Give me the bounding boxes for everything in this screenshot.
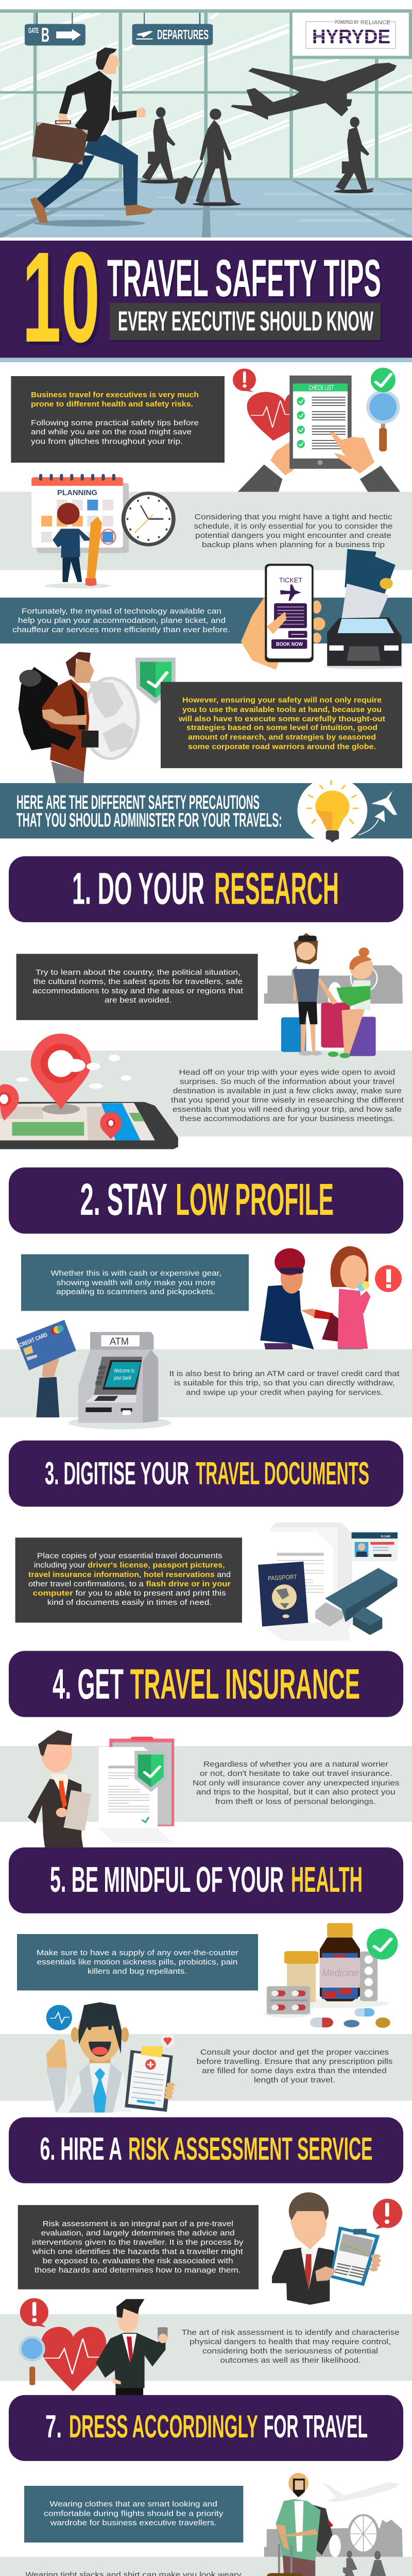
band: planning text: potential dangers you might encounter and create [195, 531, 391, 540]
heading pill 6 [9, 2117, 403, 2183]
illustration: map phone with location pins [0, 1033, 178, 1149]
panel: showing wealth [21, 1254, 249, 1311]
panel: copies of documents: kind of documents easily in times of need. [47, 1598, 212, 1607]
band: consult your doctor text: Consult your doctor and get the proper vaccines [200, 2048, 389, 2057]
band: consult your doctor text: length of your travel. [254, 2076, 335, 2084]
checklist label: CHECK LIST [309, 383, 334, 392]
panel: over the counter essentials [17, 1934, 258, 1991]
section 3: digitise your travel documents [9, 1440, 403, 1640]
band: atm card text [0, 1349, 412, 1417]
illustration: medicine bottles and pills: Medicine [322, 1968, 358, 1979]
illustration: credit card and ATM: Welcome to [114, 1368, 134, 1374]
band: head off text: Head off on your trip with your eyes wide open to avoid [179, 1068, 396, 1077]
panel: safety strategies: However, ensuring your safety will not only require [182, 696, 382, 705]
band: art of risk assessment text [0, 2314, 412, 2381]
logo: Hyryde top: POWERED BY [335, 20, 359, 25]
band: atm card text: It is also best to bring an ATM card or travel credit card that [169, 1369, 400, 1378]
big number 10 [22, 225, 103, 372]
section 4: get travel insurance [0, 1651, 412, 1850]
heading pill 5 [9, 1848, 403, 1913]
panel: safety strategies: strategies based on some level of intuition, good [186, 723, 377, 732]
illustration: tourist couple with luggage [264, 933, 403, 1058]
band: insurance text: or not, don't hesitate to take out travel insurance. [200, 1769, 392, 1778]
panel: risk assessment definition: Risk assessment is an integral part of a pre-travel [43, 2219, 233, 2228]
logo window [293, 13, 409, 56]
silhouette man [140, 107, 180, 183]
illustration: backpacker with globe and shield [19, 652, 176, 783]
heading pill 4 [9, 1651, 403, 1717]
intro panel: health and safety risks: prone to different health and safety risks. [31, 400, 193, 409]
panel: over the counter essentials: essentials like motion sickness pills, probiotics, pain [37, 1958, 237, 1967]
logo: Hyryde top [306, 20, 396, 48]
panel: learn about the country: Try to learn about the country, the political situation, [36, 968, 241, 977]
band: planning text [0, 492, 412, 570]
intro panel: health and safety risks: and while you are on the road might save [31, 428, 192, 436]
sign text: gate B [28, 24, 209, 46]
panel: over the counter essentials: Make sure to have a supply of any over-the-counter [37, 1948, 238, 1957]
panel: showing wealth: showing wealth will only make you more [57, 1279, 215, 1287]
band: insurance text [0, 1746, 412, 1822]
band: technology text: Fortunately, the myriad of technology available can [22, 607, 221, 616]
band: atm card text: is suitable for this trip, so that you can directly withdraw, [174, 1379, 395, 1387]
illustration: businessman with heart and magnifier [19, 2298, 168, 2396]
logo: Hyryde top: HYRYDE [312, 26, 390, 48]
band: art of risk assessment text: outcomes as well as their likelihood. [220, 2356, 360, 2365]
big number 10: 10 [22, 225, 100, 369]
illustration: passport, ID card and USB drive: PASSPORT [268, 1573, 298, 1582]
panel: learn about the country [16, 954, 258, 1020]
panel: copies of documents: including your driver's license , passport pictures , [34, 1561, 225, 1570]
band: consult your doctor text [0, 2034, 412, 2101]
panel: safety strategies: you to use the available tools at hand, because you [182, 705, 382, 714]
panel: learn about the country: accommodations to stay and the areas or regions that [32, 987, 244, 995]
heading pill 6: 6. HIRE A [40, 2131, 122, 2167]
plane silhouette [231, 63, 397, 120]
panel: risk assessment definition: be exposed to, evaluates the risk associated with [43, 2257, 233, 2265]
section 6: hire a risk assessment service [0, 2117, 412, 2396]
band: insurance text: Regardless of whether you are a natural worrier [203, 1760, 388, 1769]
band: insurance text: Not only will insurance cover any unexpected injuries [193, 1778, 400, 1787]
illustration: businessman with insurance policy [28, 1730, 174, 1850]
panel: risk assessment definition: evaluation, and largely determines the advice and [41, 2229, 235, 2238]
silhouette woman with suitcase [175, 109, 241, 206]
panel: smart clothes: Wearing clothes that are smart looking and [49, 2500, 217, 2509]
hero: airport terminal scene [0, 9, 412, 238]
panel: smart clothes [24, 2486, 243, 2543]
sign text: gate B: GATE [28, 26, 39, 35]
heading pill 2 [9, 1167, 403, 1233]
band: insurance text: and trips to the hospital, but it can also protect you [196, 1788, 396, 1797]
heading pill 3: 3. DIGITISE YOUR [45, 1455, 189, 1492]
band: tight slacks text [0, 2557, 412, 2576]
ticket and book now labels: TICKET [279, 576, 302, 584]
illustration: credit card and ATM: your bank [113, 1375, 131, 1381]
panel: learn about the country: the cultural norms, the safest spots for travellers, safe [33, 977, 243, 986]
panel: copies of documents: Place copies of your essential travel documents [37, 1552, 222, 1560]
heading pill 4: 4. GET [53, 1660, 124, 1708]
section 7: dress accordingly for travel [0, 2395, 412, 2576]
ticket and book now labels [276, 576, 303, 647]
illustration: traveller with suitcase, skyline and plane [264, 2473, 403, 2576]
panel: risk assessment definition [18, 2205, 259, 2290]
band: head off text: these accommodations are for your business meetings. [180, 1114, 395, 1123]
band: art of risk assessment text: physical dangers to health that may require control, [190, 2337, 391, 2346]
band: technology text: help you plan your accommodation, plane ticket, and [18, 616, 226, 625]
band: atm card text: and swipe up your credit when paying for services. [186, 1388, 383, 1397]
band: planning text: backup plans when planning for a business trip [202, 540, 385, 549]
panel: risk assessment definition: which one identifies the hazards that a traveller might [32, 2247, 244, 2256]
illustration: businessman with risk chart [272, 2192, 402, 2304]
heading pill 7 [9, 2395, 403, 2461]
intro panel: health and safety risks: Business travel for executives is very much [31, 391, 199, 399]
illustration: medicine bottles and pills [264, 1923, 398, 2028]
panel: risk assessment definition: interventions given to the traveller. It is the process by [32, 2238, 244, 2247]
illustration: checklist tablet with heart and magnifier [233, 368, 400, 492]
band: art of risk assessment text: considering both the seriousness of potential [202, 2347, 378, 2355]
ticket and book now labels: BOOK NOW [276, 641, 303, 647]
panel: risk assessment definition: those hazards and determines how to manage them. [35, 2266, 241, 2275]
band: insurance text: from theft or loss of personal belongings. [215, 1797, 376, 1806]
panel: safety strategies: amount of research, and strategies by seasoned [188, 733, 376, 742]
section 5: be mindful of your health [0, 1848, 412, 2113]
intro panel: health and safety risks [11, 376, 225, 463]
sign text: gate B: DEPARTURES [157, 27, 209, 42]
band: art of risk assessment text: The art of risk assessment is to identify and characterise [182, 2328, 400, 2337]
planning label: PLANNING [57, 488, 97, 497]
running businessman [30, 47, 153, 227]
heading pill 1: 1. DO YOUR [72, 863, 204, 913]
illustration: passport, ID card and USB drive [258, 1522, 398, 1640]
heading pill 2: 2. STAY [80, 1175, 167, 1225]
big number 10: 10 [25, 229, 103, 372]
panel: learn about the country: are best avoided. [105, 996, 171, 1005]
illustration: credit card and ATM: ATM [110, 1336, 129, 1347]
band: planning text: Considering that you might have a tight and hectic [195, 513, 392, 521]
sign text: gate B: B [41, 24, 49, 46]
band: head off text [0, 1050, 412, 1137]
panel: showing wealth: Whether this is with cash or expensive gear, [50, 1269, 221, 1278]
panel: smart clothes: comfortable during flights should be a priority [44, 2509, 224, 2518]
illustration: pickpocket and woman [260, 1246, 402, 1349]
section 1: do your research [0, 856, 412, 1149]
icon: light bulb and plane [298, 777, 397, 843]
illustration: credit card and ATM: CREDIT CARD [19, 1332, 48, 1349]
panel: safety strategies [161, 682, 402, 768]
panel: copies of documents: travel insurance information , hotel reservations and [28, 1570, 231, 1579]
logo: Hyryde top: RELIANCE [360, 20, 390, 26]
illustration: planning calendar, person, clock [31, 474, 176, 588]
band: head off text: surprises. So much of the information about your travel [180, 1077, 394, 1086]
section 2: stay low profile [0, 1167, 412, 1429]
panel: safety strategies: will also have to execute some carefully thought-out [178, 715, 385, 723]
gate sign [25, 13, 213, 45]
panel: copies of documents [15, 1537, 242, 1623]
heading pill 7: 7. [45, 2409, 62, 2445]
title banner [0, 225, 412, 372]
band: head off text: destination is available in just a few clicks away, make sure [173, 1087, 402, 1095]
illustration: passport, ID card and USB drive: ID CARD [381, 1535, 390, 1538]
band: technology text: chauffeur car services more efficiently than ever before. [12, 625, 230, 634]
frame bars [0, 9, 412, 181]
panel: copies of documents: computer for you to able to present and print this [33, 1589, 226, 1598]
band: consult your doctor text: before travelling. Ensure that any prescription pills [197, 2057, 392, 2066]
heading pill 1 [9, 856, 403, 922]
panel: over the counter essentials: killers and bug repellants. [88, 1967, 187, 1976]
silhouette man right [334, 117, 374, 193]
panel: copies of documents: other travel confirmations, to a flash drive or in your [28, 1580, 231, 1588]
band: planning text: schedule, it is only essential for you to consider the [194, 522, 392, 531]
intro panel: health and safety risks: Following some practical safety tips before [31, 418, 199, 428]
illustration: credit card and ATM [16, 1320, 171, 1429]
intro panel: health and safety risks: you from glitches throughout your trip. [31, 437, 183, 446]
band: safety precautions heading [0, 777, 412, 843]
illustration: phone booking, tickets and car [241, 549, 403, 670]
band: head off text: that you spend your time wisely in researching the different [171, 1096, 404, 1105]
band: technology text [0, 598, 412, 643]
illustration: doctor with clipboard [46, 2002, 175, 2113]
panel: safety strategies: some corporate road warriors around the globe. [188, 742, 376, 751]
panel: smart clothes: wardrobe for business executive travellers. [50, 2519, 217, 2528]
band: head off text: essentials that you will need during your trip, and how safe [173, 1105, 402, 1114]
panel: showing wealth: appealing to scammers and pickpockets. [56, 1287, 215, 1296]
heading pill 3 [9, 1440, 403, 1506]
band: consult your doctor text: are filled for some days extra than the intended [202, 2066, 387, 2075]
